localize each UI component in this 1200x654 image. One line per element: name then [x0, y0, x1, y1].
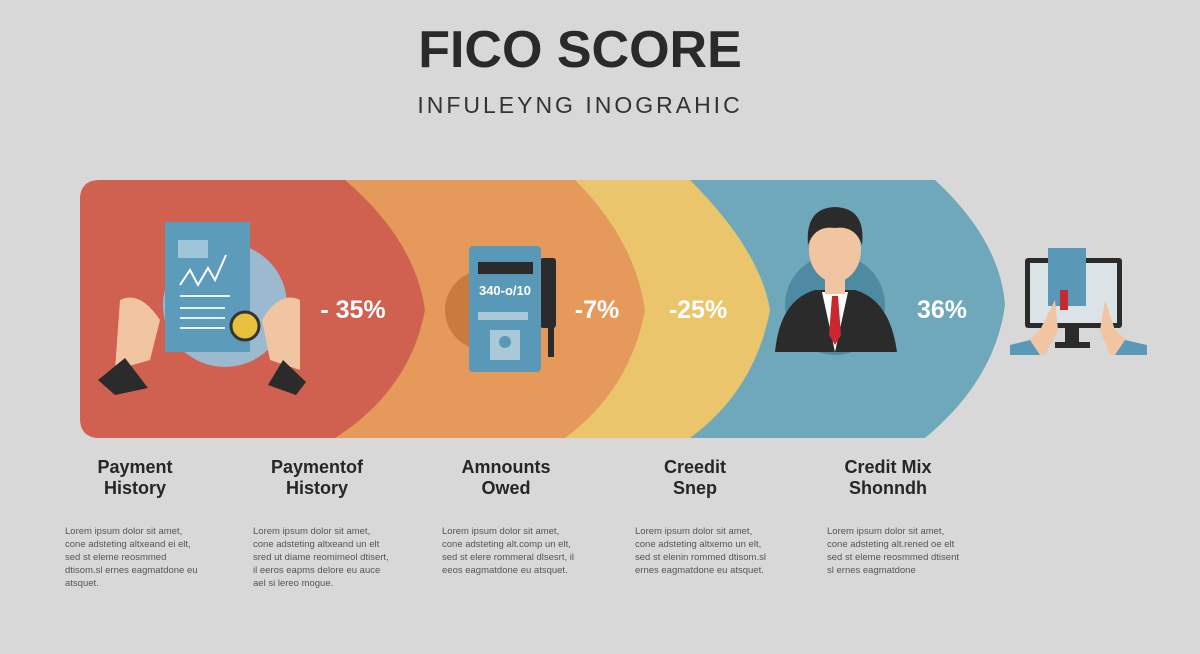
label: Paymentof History: Paymentof	[271, 457, 363, 477]
segment: orange	[80, 180, 645, 438]
text block 4: Lorem ipsum dolor sit amet, cone adsteting altxemo un elt, sed st elenin rommed dtisom.sl ernes eagmatdone eu atsquet.	[635, 526, 766, 576]
label: Payment History	[97, 457, 173, 498]
label: Paymentof History: History	[286, 478, 348, 498]
label: Creedit Snep: Snep	[673, 478, 717, 498]
subtitle: INFULEYNG INOGRAHIC	[417, 92, 743, 118]
label: Payment History: History	[104, 478, 166, 498]
label: Amnounts Owed	[462, 457, 550, 498]
icon: businessman	[775, 207, 897, 355]
icon: document with hands	[98, 222, 306, 395]
segment: yellow	[80, 180, 770, 438]
icon: card device: 340-o/10	[479, 283, 531, 298]
label: Amnounts Owed: Amnounts	[462, 457, 550, 477]
label: Amnounts Owed: Owed	[481, 478, 530, 498]
label: Credit Mix Shonndh: Shonndh	[849, 478, 927, 498]
segment: orange: -7%	[575, 296, 619, 324]
label: Payment History: Payment	[97, 457, 173, 477]
label: Creedit Snep: Creedit	[664, 457, 726, 477]
segment: red	[80, 180, 425, 438]
segment: blue: 36%	[917, 296, 967, 324]
text block 1: Lorem ipsum dolor sit amet, cone adsteting altxeand ei elt, sed st eleme reosmmed dtisom.sl ernes eagmatdone eu atsquet.	[65, 526, 198, 589]
text block 5: Lorem ipsum dolor sit amet, cone adsteting alt.rened oe elt sed st eleme reosmmed dtisent sl ernes eagmatdone	[827, 526, 959, 576]
icon: card device	[445, 246, 556, 372]
label: Credit Mix Shonndh: Credit Mix	[844, 457, 932, 477]
text block 3: Lorem ipsum dolor sit amet, cone adsteting alt.comp un elt, sed st elere rommeral dlsesrt, il eeos eagmatdone eu atsquet.	[442, 526, 574, 576]
segment: red: - 35%	[320, 296, 386, 324]
label: Credit Mix Shonndh	[844, 457, 932, 498]
label: Creedit Snep	[664, 457, 726, 498]
title: FICO SCORE	[418, 21, 742, 79]
icon: computer with hands	[1010, 248, 1147, 355]
label: Paymentof History	[271, 457, 364, 498]
text block 2: Lorem ipsum dolor sit amet, cone adsteting altxeand un elt sred ut diame reomimeol dtisert, il eeros eapms delore eu auce ael si lereo mogue.	[253, 526, 389, 589]
segment: yellow: -25%	[669, 296, 727, 324]
